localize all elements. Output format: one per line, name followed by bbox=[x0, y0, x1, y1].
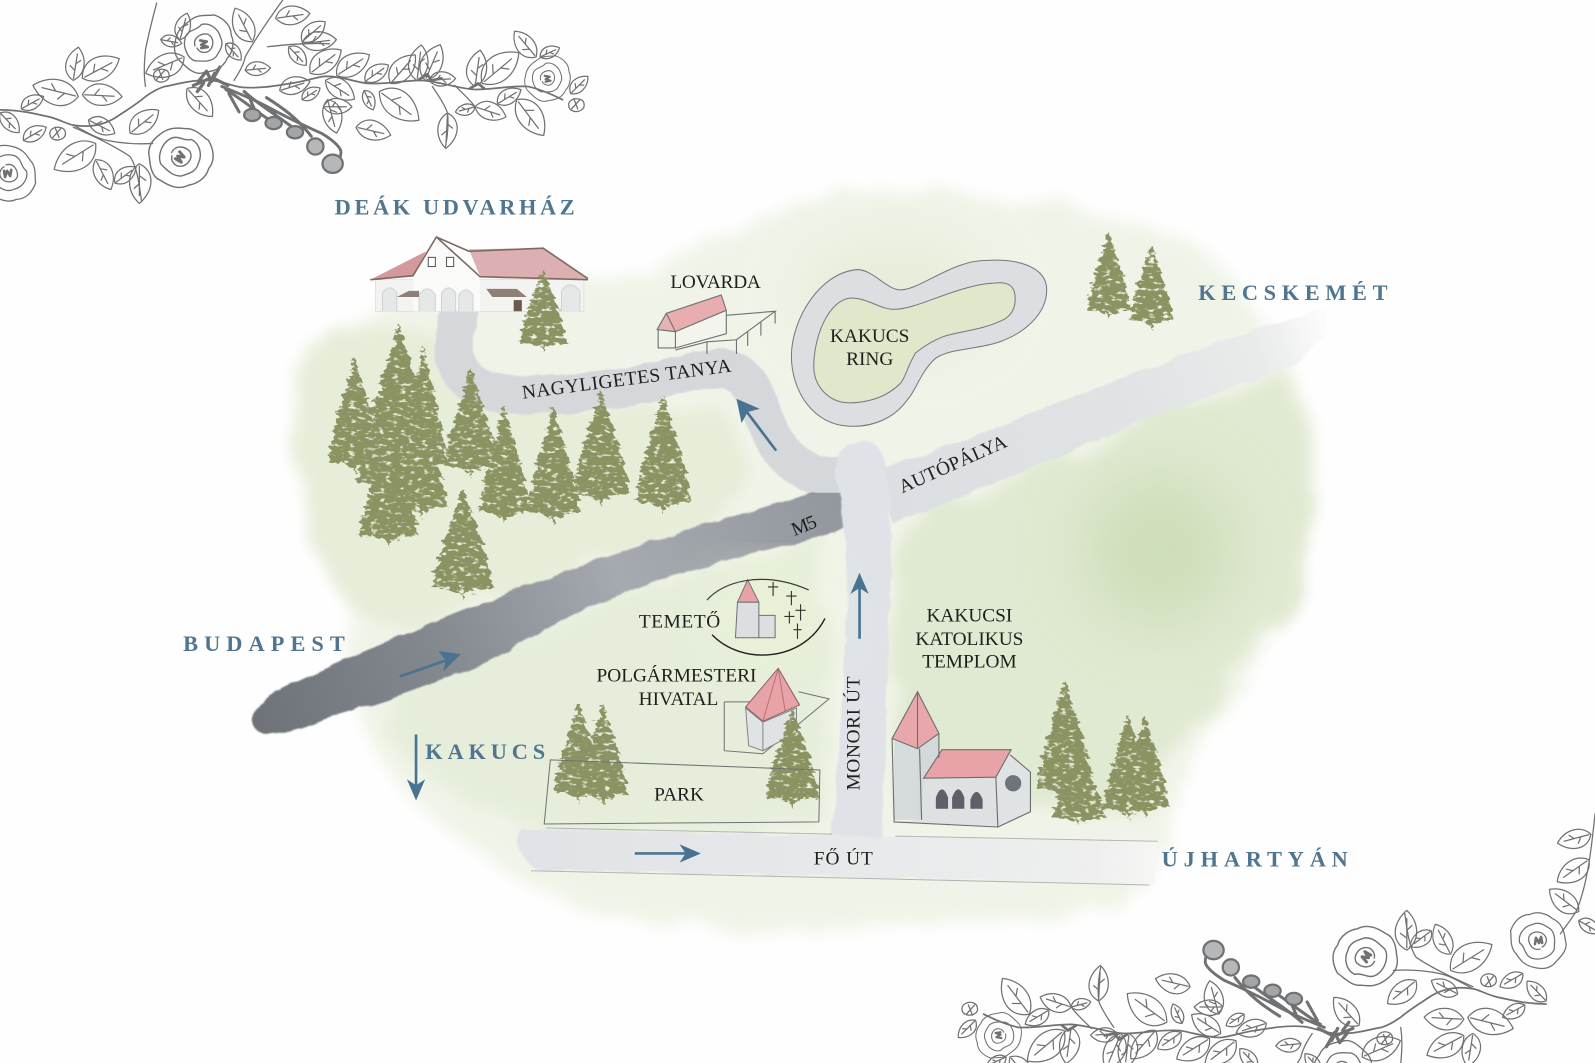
park outline bbox=[544, 760, 820, 824]
tree: by manor bbox=[519, 269, 568, 352]
tree: Polgármesteri front bbox=[765, 707, 820, 809]
label: Polgármesteri Hivatal: POLGÁRMESTERI bbox=[597, 665, 756, 687]
road: Nagyligetes Tanya bbox=[453, 310, 842, 476]
building: Polgármesteri Hivatal bbox=[724, 668, 829, 754]
label: Kakucsi Katolikus Templom: KATOLIKUS bbox=[915, 629, 1023, 650]
arrow: Kakucs direction bbox=[407, 734, 425, 801]
watercolour wash: lower right bbox=[895, 371, 1310, 815]
road edges bbox=[531, 828, 1158, 885]
label: Fő út: FŐ ÚT bbox=[814, 848, 873, 870]
destination label: Budapest: BUDAPEST bbox=[183, 631, 345, 656]
floral sprig: right edge bbox=[1543, 814, 1595, 938]
label: M5: M5 bbox=[788, 512, 820, 541]
destination label: Deák Udvarház: DEÁK UDVARHÁZ bbox=[335, 195, 575, 220]
building: Temető chapel and crosses bbox=[707, 579, 825, 655]
watercolour wash: pale base bbox=[292, 187, 1315, 932]
watercolour wash: lower left bbox=[376, 529, 829, 839]
watercolour wash: green by ring bbox=[799, 239, 992, 351]
road: M5 motorway bbox=[252, 482, 846, 734]
arrow: Fő út direction bbox=[635, 844, 701, 863]
arrow: Monori út direction bbox=[850, 573, 869, 639]
building: Kakucsi Katolikus Templom bbox=[892, 692, 1030, 827]
floral garland: top left bbox=[0, 0, 592, 203]
trees: forest bbox=[328, 323, 692, 600]
label: Polgármesteri Hivatal: HIVATAL bbox=[639, 689, 718, 710]
watercolour wash: darker patch bbox=[1083, 473, 1236, 626]
arrow: M5 direction bbox=[400, 651, 461, 676]
label: Lovarda: LOVARDA bbox=[670, 272, 761, 293]
trees: upper right bbox=[1086, 232, 1174, 330]
label: Monori út: MONORI ÚT bbox=[843, 676, 865, 790]
label: Temető: TEMETŐ bbox=[639, 611, 720, 633]
road: Monori út bbox=[832, 440, 891, 839]
trees: park bbox=[553, 702, 629, 806]
label: Park: PARK bbox=[654, 785, 704, 806]
label: Nagyligetes Tanya: NAGYLIGETES TANYA bbox=[521, 356, 732, 404]
label: Kakucs Ring: KAKUCS bbox=[830, 326, 909, 347]
trees: by church bbox=[1036, 680, 1170, 826]
destination label: Kakucs: KAKUCS bbox=[425, 739, 545, 764]
label: Autópálya: AUTÓPÁLYA bbox=[895, 431, 1010, 498]
floral garland: bottom right bbox=[954, 910, 1566, 1063]
destination label: Újhartyán: ÚJHARTYÁN bbox=[1162, 846, 1348, 872]
building: Lovarda bbox=[657, 295, 775, 354]
arrow: Nagyligetes direction bbox=[736, 399, 776, 451]
building: Deák Udvarház manor bbox=[370, 237, 588, 311]
destination label: Kecskemét: KECSKEMÉT bbox=[1198, 280, 1388, 305]
road: Fő út bbox=[518, 829, 1158, 885]
watercolour wash: forest left bbox=[299, 326, 743, 631]
road: Autópálya bbox=[880, 308, 1327, 524]
label: Kakucs Ring: RING bbox=[846, 349, 893, 370]
label: Kakucsi Katolikus Templom: KAKUCSI bbox=[926, 606, 1012, 627]
label: Kakucsi Katolikus Templom: TEMPLOM bbox=[922, 651, 1017, 672]
road: Kakucs Ring bbox=[791, 260, 1047, 426]
